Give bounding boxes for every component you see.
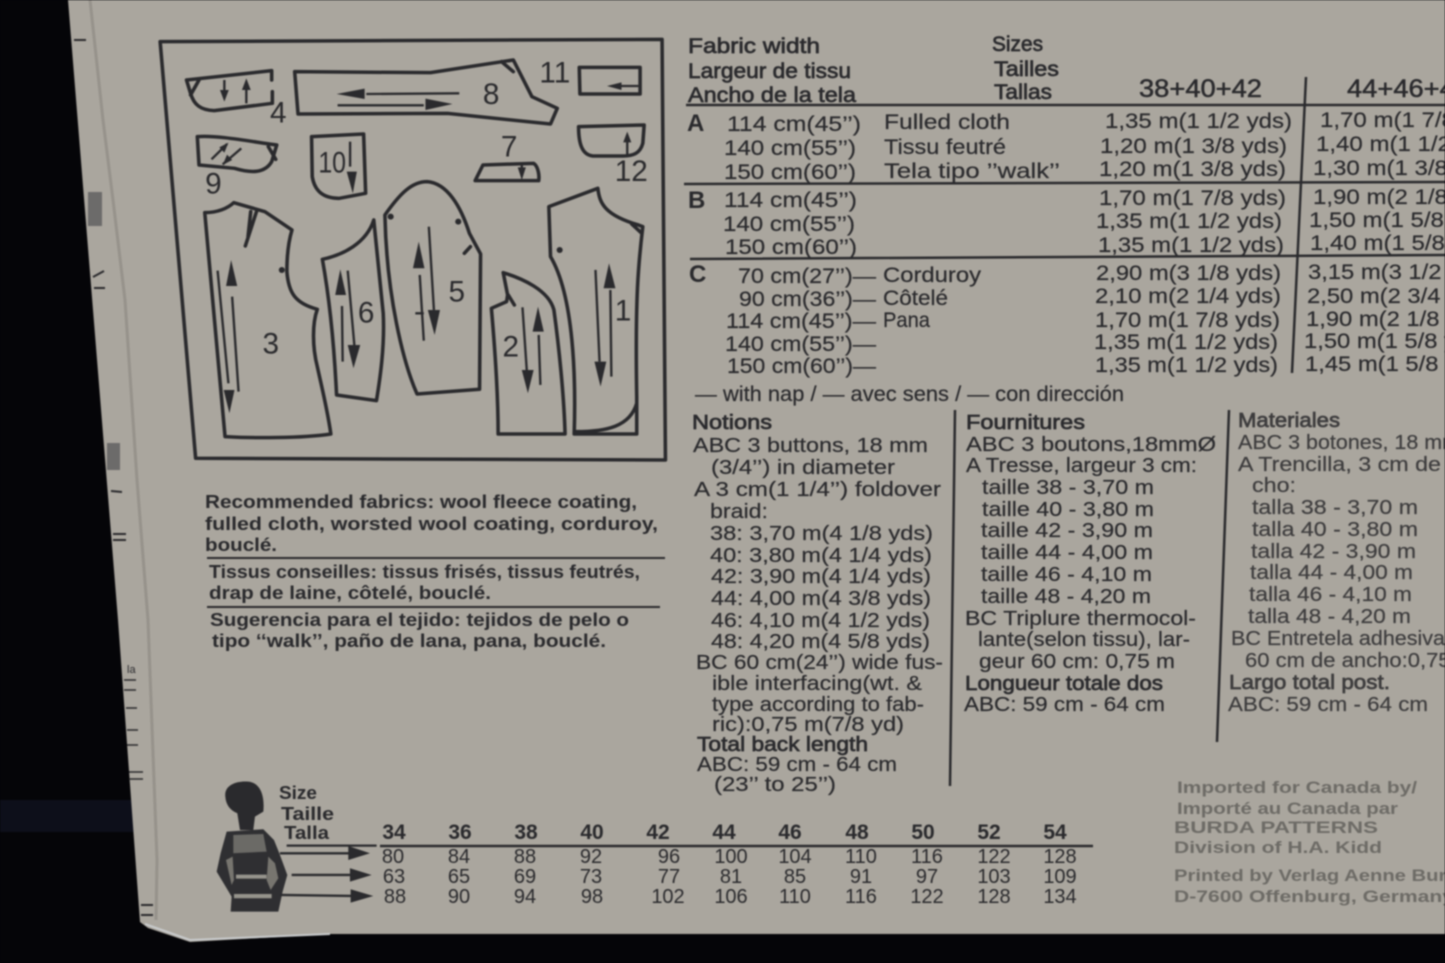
- table: fabric requirements: [684, 32, 1445, 406]
- table: body measurements: 34: [382, 821, 406, 844]
- text block: notions: ible interfacing(wt. &: [712, 672, 922, 695]
- table: body measurements: 69: [514, 866, 536, 888]
- piece 12: 12: [615, 155, 648, 188]
- table: fabric requirements: C: [689, 261, 706, 288]
- table: body measurements: 88: [384, 886, 406, 908]
- piece 7: [475, 131, 539, 181]
- table: body measurements: 90: [448, 886, 470, 908]
- table: fabric requirements: 1,35 m(1 1/2 yds): [1095, 353, 1278, 377]
- text block: notions: Notions: [692, 411, 772, 434]
- text block: materiales: talla 48 - 4,20 m: [1248, 605, 1411, 628]
- piece 12: [579, 125, 648, 188]
- table: body measurements: 92: [580, 846, 602, 868]
- piece 10: [312, 134, 366, 198]
- piece 4: [187, 71, 287, 130]
- text block: materiales: [1228, 409, 1445, 716]
- size labels: Taille: [281, 803, 334, 824]
- piece 11: [539, 57, 640, 94]
- text block: materiales: talla 44 - 4,00 m: [1250, 561, 1413, 584]
- table: fabric requirements: 1,35 m(1 1/2 yds): [1098, 233, 1284, 257]
- piece 3: 3: [263, 327, 279, 360]
- text block: materiales: BC Entretela adhesiva: [1231, 627, 1445, 650]
- text block: fournitures: taille 46 - 4,10 m: [981, 563, 1152, 586]
- table: fabric requirements: Tailles: [994, 57, 1059, 81]
- table: fabric requirements: 140 cm(55’’): [723, 212, 855, 236]
- table: body measurements: 77: [658, 866, 680, 888]
- table: body measurements: 110: [779, 886, 811, 908]
- piece 9: [197, 136, 277, 200]
- text block: notions: 48: 4,20 m(4 5/8 yds): [711, 630, 930, 653]
- text block: fournitures: ABC 3 boutons,18mmØ: [966, 433, 1216, 456]
- text block: fournitures: geur 60 cm: 0,75 m: [979, 650, 1175, 673]
- table: fabric requirements: Pana: [883, 308, 930, 332]
- text block: fournitures: [964, 411, 1216, 716]
- text block: fournitures: taille 48 - 4,20 m: [981, 585, 1151, 608]
- text block: materiales: ABC: 59 cm - 64 cm: [1228, 693, 1428, 716]
- text block: fournitures: taille 44 - 4,00 m: [981, 541, 1153, 564]
- text block: materiales: Materiales: [1238, 409, 1340, 432]
- text block: fournitures: Fournitures: [966, 411, 1085, 434]
- table: body measurements: 38: [514, 821, 538, 844]
- table: body measurements: 96: [658, 846, 680, 868]
- table: body measurements: 42: [646, 821, 670, 844]
- table: fabric requirements: 90 cm(36’’)—: [739, 287, 877, 311]
- table: body measurements: 88: [514, 846, 536, 868]
- table: body measurements: 122: [910, 886, 944, 908]
- table: body measurements: 91: [850, 866, 872, 888]
- table: fabric requirements: 150 cm(60’’)—: [727, 354, 877, 378]
- diagram frame: [160, 39, 665, 460]
- table: body measurements: 44: [712, 821, 736, 844]
- text block: materiales: ABC 3 botones, 18 mm: [1238, 431, 1445, 454]
- piece 11: 11: [539, 57, 570, 90]
- text block: notions: BC 60 cm(24’’) wide fus-: [696, 651, 943, 674]
- table: fabric requirements: 1,70 m(1 7/8 yds): [1099, 186, 1286, 210]
- table: body measurements: 65: [448, 866, 470, 888]
- table: body measurements: 50: [911, 821, 935, 844]
- table: fabric requirements: 1,35 m(1 1/2 yds): [1105, 109, 1292, 133]
- piece 9: 9: [205, 167, 222, 200]
- text block: notions: braid:: [710, 500, 768, 523]
- table: body measurements: 106: [714, 886, 748, 908]
- table: body measurements: 94: [514, 886, 536, 908]
- table: fabric requirements: 140 cm(55’’)—: [725, 332, 877, 356]
- table: body measurements: 40: [580, 821, 604, 844]
- table: body measurements: 84: [448, 846, 470, 868]
- piece 6: 6: [358, 297, 374, 330]
- table: fabric requirements: 114 cm(45’’): [727, 112, 861, 136]
- text block: notions: 46: 4,10 m(4 1/2 yds): [711, 609, 930, 632]
- table: fabric requirements: 140 cm(55’’): [724, 136, 856, 160]
- piece 10: 10: [318, 147, 346, 180]
- text block: materiales: talla 38 - 3,70 m: [1252, 496, 1418, 519]
- piece 2: 2: [503, 331, 519, 364]
- table: body measurements: 103: [977, 866, 1011, 888]
- text block: import and printing credits: Imported for Canada by/: [1177, 778, 1417, 797]
- table: body measurements: 63: [383, 866, 405, 888]
- table: fabric requirements: 70 cm(27’’)—: [738, 264, 877, 288]
- text block: recommended fabrics: bouclé.: [205, 534, 277, 555]
- text block: recommended fabrics: Tissus conseilles: tissus frisés, tissus feutrés,: [209, 561, 640, 582]
- text block: notions: 40: 3,80 m(4 1/4 yds): [710, 544, 932, 567]
- table: fabric requirements: Ancho de la tela: [688, 83, 856, 107]
- text block: materiales: talla 40 - 3,80 m: [1252, 518, 1418, 541]
- text block: import and printing credits: Division of H.A. Kidd: [1174, 838, 1382, 857]
- spine marks: [74, 40, 153, 915]
- text block: recommended fabrics: Sugerencia para el tejido: tejidos de pelo o: [210, 609, 629, 630]
- spine marks: la: [127, 664, 136, 676]
- text block: fournitures: ABC: 59 cm - 64 cm: [964, 693, 1165, 716]
- size labels: [279, 782, 334, 843]
- piece 8: 8: [483, 78, 499, 111]
- text block: import and printing credits: Importé au Canada par: [1177, 799, 1398, 818]
- piece 1: [549, 188, 643, 434]
- piece 7: 7: [501, 131, 517, 164]
- text block: fournitures: BC Triplure thermocol-: [965, 607, 1196, 630]
- piece 3: [205, 203, 331, 438]
- table: body measurements: 52: [977, 821, 1001, 844]
- piece 5: 5: [448, 276, 465, 309]
- table: fabric requirements: Fulled cloth: [884, 110, 1010, 134]
- text block: fournitures: taille 38 - 3,70 m: [982, 476, 1154, 499]
- table: body measurements: 128: [977, 886, 1011, 908]
- text block: notions: ric):0,75 m(7/8 yd): [712, 713, 904, 736]
- text block: notions: A 3 cm(1 1/4’’) foldover: [694, 478, 941, 501]
- text block: notions: (3/4’’) in diameter: [711, 456, 895, 479]
- text block: recommended fabrics: fulled cloth, worsted wool coating, corduroy,: [205, 513, 658, 534]
- table: body measurements: 80: [382, 846, 404, 868]
- table: body measurements: 81: [720, 866, 742, 888]
- table: fabric requirements: 1,20 m(1 3/8 yds): [1099, 157, 1286, 181]
- table: fabric requirements: — with nap / — avec sens / — con dirección: [695, 382, 1124, 406]
- piece 2: [491, 273, 565, 434]
- text block: recommended fabrics: [205, 491, 665, 651]
- text block: notions: (23’’ to 25’’): [714, 773, 836, 796]
- piece 1: 1: [615, 295, 631, 328]
- text block: fournitures: lante(selon tissu), lar-: [978, 628, 1190, 651]
- panel: cutting layout diagram: [160, 39, 665, 460]
- piece 6: [322, 220, 384, 401]
- text block: recommended fabrics: Recommended fabrics: wool fleece coating,: [205, 491, 637, 512]
- table: fabric requirements: 2,90 m(3 1/8 yds): [1096, 261, 1281, 285]
- table: body measurements: 85: [784, 866, 806, 888]
- text block: import and printing credits: BURDA PATTERNS: [1174, 818, 1378, 837]
- table: fabric requirements: 1,35 m(1 1/2 yds): [1094, 330, 1278, 354]
- text block: recommended fabrics: drap de laine, côtelé, bouclé.: [209, 582, 491, 603]
- piece 5: [385, 182, 481, 394]
- table: body measurements: 54: [1043, 821, 1067, 844]
- table: body measurements: 36: [448, 821, 472, 844]
- table: fabric requirements: 1,70 m(1 7/8 yds): [1095, 308, 1280, 332]
- table: fabric requirements: Tallas: [994, 80, 1052, 104]
- text block: materiales: A Trencilla, 3 cm de: [1238, 453, 1441, 476]
- table: body measurements: 104: [778, 846, 812, 868]
- piece 8: [295, 60, 557, 124]
- text block: import and printing credits: D-7600 Offenburg, Germany: [1174, 887, 1445, 906]
- table: fabric requirements: Côtelé: [883, 286, 948, 310]
- table: fabric requirements: 114 cm(45’’): [724, 188, 857, 212]
- table: fabric requirements: Largeur de tissu: [688, 59, 851, 83]
- table: fabric requirements: Tissu feutré: [884, 135, 1006, 159]
- size labels: Talla: [284, 822, 330, 843]
- text block: notions: [692, 411, 943, 796]
- table: fabric requirements: 1,35 m(1 1/2 yds): [1096, 209, 1282, 233]
- column dividers: [950, 410, 1229, 786]
- text block: import and printing credits: Printed by Verlag Aenne Burda: [1174, 866, 1445, 885]
- icon: figure with measurement arrows: [217, 782, 377, 912]
- table: fabric requirements: Tela tipo ’’walk’’: [884, 159, 1060, 183]
- table: body measurements: 109: [1043, 866, 1077, 888]
- text block: materiales: talla 46 - 4,10 m: [1249, 583, 1412, 606]
- table: body measurements: 46: [778, 821, 802, 844]
- text block: fournitures: Longueur totale dos: [965, 672, 1163, 695]
- table: body measurements: 97: [916, 866, 938, 888]
- text block: notions: ABC 3 buttons, 18 mm: [693, 434, 928, 457]
- text block: materiales: talla 42 - 3,90 m: [1251, 540, 1416, 563]
- text block: notions: 42: 3,90 m(4 1/4 yds): [711, 565, 931, 588]
- table: fabric requirements: 114 cm(45’’)—: [726, 309, 877, 333]
- table: fabric requirements: 2,10 m(2 1/4 yds): [1095, 284, 1281, 308]
- table: body measurements: [380, 821, 1093, 908]
- table: body measurements: 122: [977, 846, 1011, 868]
- piece 4: 4: [270, 97, 287, 130]
- table: body measurements: 110: [845, 846, 877, 868]
- table: fabric requirements: A: [687, 110, 704, 137]
- table: fabric requirements: B: [688, 187, 705, 214]
- text block: materiales: Largo total post.: [1229, 671, 1390, 694]
- table: fabric requirements: 150 cm(60’’): [724, 160, 856, 184]
- text block: fournitures: A Tresse, largeur 3 cm:: [966, 454, 1197, 477]
- table: fabric requirements: 38+40+42: [1139, 75, 1262, 103]
- text block: notions: ABC: 59 cm - 64 cm: [697, 753, 897, 776]
- text block: notions: 44: 4,00 m(4 3/8 yds): [711, 587, 931, 610]
- table: body measurements: 73: [580, 866, 602, 888]
- table: body measurements: 128: [1043, 846, 1077, 868]
- table: fabric requirements: Fabric width: [688, 34, 820, 58]
- table: body measurements: 98: [581, 886, 603, 908]
- text block: import and printing credits: [1174, 778, 1445, 906]
- table: body measurements: 134: [1043, 886, 1077, 908]
- text block: fournitures: taille 42 - 3,90 m: [981, 519, 1153, 542]
- table: body measurements: 48: [845, 821, 869, 844]
- text block: notions: Total back length: [697, 733, 868, 756]
- text block: notions: type according to fab-: [712, 693, 924, 716]
- table: fabric requirements: Sizes: [992, 32, 1043, 56]
- table: body measurements: 102: [651, 886, 685, 908]
- text block: fournitures: taille 40 - 3,80 m: [982, 498, 1154, 521]
- table: fabric requirements: Corduroy: [883, 263, 981, 287]
- text block: recommended fabrics: tipo ‘‘walk’’, paño de lana, pana, bouclé.: [212, 630, 606, 651]
- table: body measurements: 100: [714, 846, 748, 868]
- table: body measurements: 116: [911, 846, 943, 868]
- text block: notions: 38: 3,70 m(4 1/8 yds): [710, 522, 933, 545]
- size labels: Size: [279, 782, 317, 803]
- table: fabric requirements: 150 cm(60’’): [725, 235, 857, 259]
- table: fabric requirements: 1,20 m(1 3/8 yds): [1100, 134, 1287, 158]
- table: body measurements: 116: [845, 886, 877, 908]
- text block: materiales: cho:: [1252, 474, 1296, 497]
